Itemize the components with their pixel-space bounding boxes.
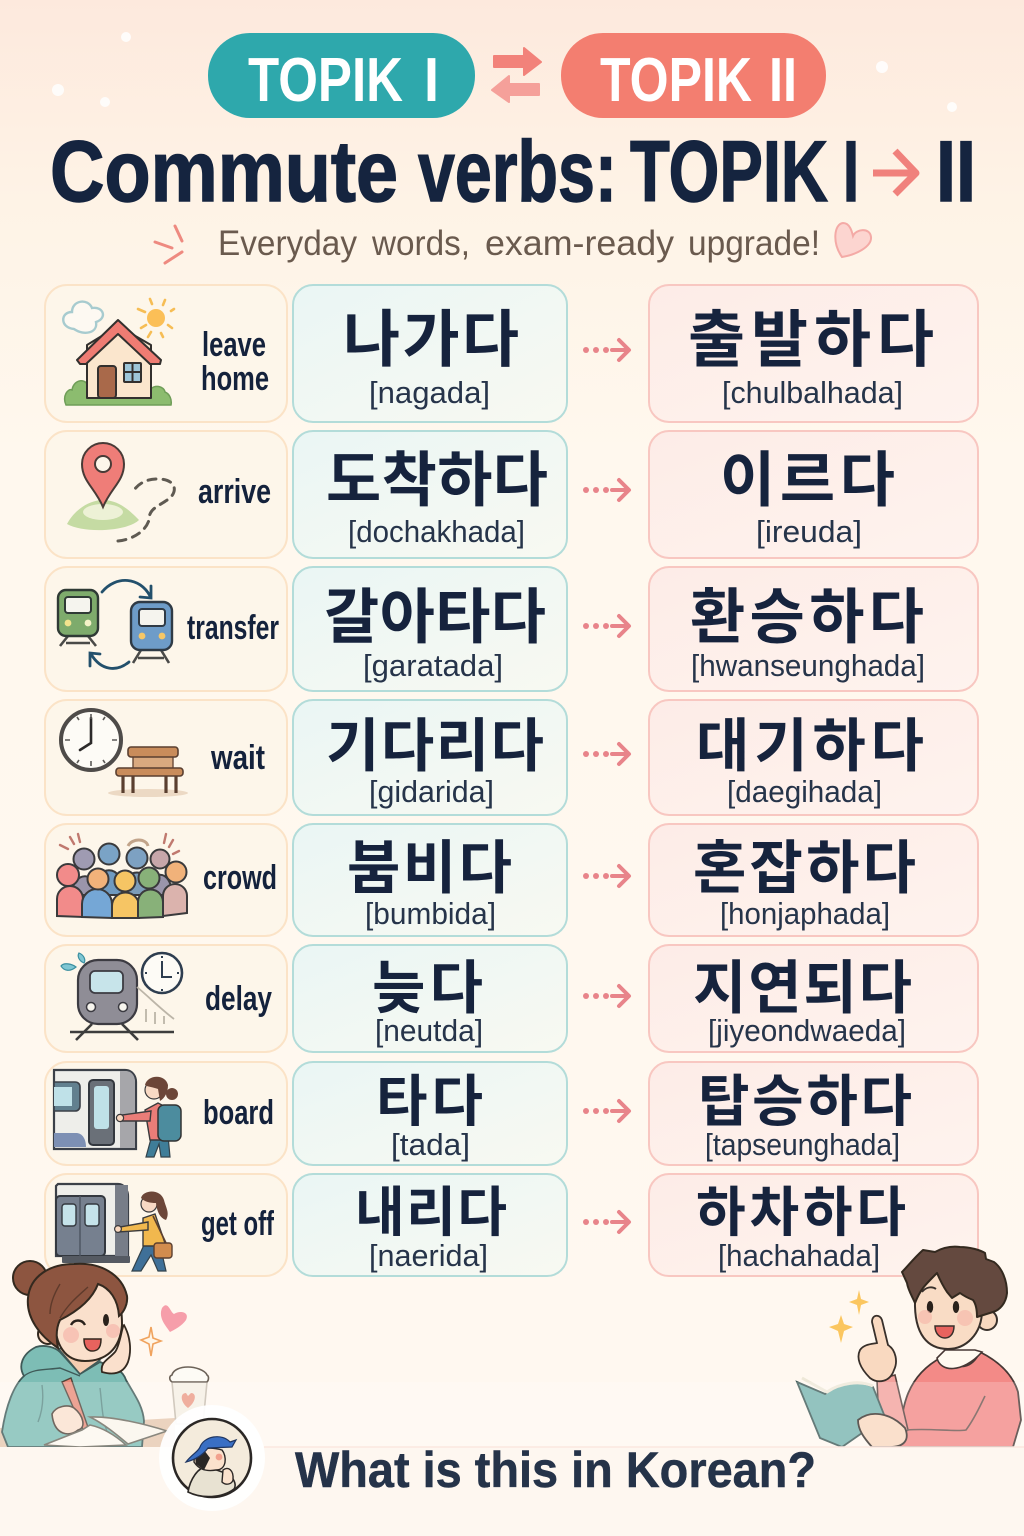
panel: 혼잡하다: [honjaphada] bbox=[720, 896, 890, 931]
icon: house with sun bbox=[63, 299, 174, 405]
label: get off: get off bbox=[201, 1205, 274, 1243]
title: Commute bbox=[50, 124, 398, 220]
icon: crowd of people bbox=[57, 834, 187, 918]
panel: leave home bbox=[45, 285, 287, 422]
panel: 기다리다: 기다리다 bbox=[326, 714, 544, 779]
icon: person boarding train bbox=[54, 1070, 181, 1157]
panel: 갈아타다: 갈아타다 bbox=[324, 584, 546, 651]
title: II bbox=[936, 124, 976, 220]
panel: delay bbox=[45, 945, 287, 1052]
panel: 나가다: 나가다 bbox=[343, 306, 519, 375]
icon: person getting off train bbox=[56, 1184, 172, 1271]
arrow bbox=[583, 1101, 629, 1121]
panel: wait bbox=[45, 700, 287, 815]
badge: TOPIK II: II bbox=[769, 46, 797, 115]
label: leave home bbox=[201, 326, 269, 398]
panel: 나가다 bbox=[293, 285, 567, 422]
label: leave home: leave bbox=[202, 326, 266, 364]
arrow bbox=[583, 1212, 629, 1232]
panel: 타다: [tada] bbox=[391, 1127, 470, 1162]
label: transfer: transfer bbox=[187, 609, 279, 647]
arrow bbox=[583, 986, 629, 1006]
panel: 환승하다: 환승하다 bbox=[690, 584, 924, 651]
panel: 대기하다 bbox=[649, 700, 978, 815]
panel: 도착하다: 도착하다 bbox=[326, 447, 548, 514]
panel: 갈아타다 bbox=[293, 567, 567, 691]
panel: 내리다: [naerida] bbox=[369, 1238, 488, 1273]
row 7: board bbox=[45, 1062, 978, 1165]
panel: 타다 bbox=[293, 1062, 567, 1165]
label: wait: wait bbox=[210, 739, 265, 777]
panel: 이르다: [ireuda] bbox=[756, 514, 862, 549]
label: arrive: arrive bbox=[198, 473, 271, 511]
arrow bbox=[583, 616, 629, 636]
panel: board bbox=[45, 1062, 287, 1165]
row 3: transfer bbox=[45, 567, 978, 691]
panel: 붐비다: 붐비다 bbox=[347, 836, 512, 901]
subtitle: words, bbox=[371, 224, 470, 263]
label: delay: delay bbox=[205, 980, 272, 1018]
panel: 도착하다 bbox=[293, 431, 567, 558]
panel: 타다: 타다 bbox=[376, 1070, 483, 1133]
panel: 하차하다 bbox=[649, 1174, 978, 1276]
panel: 이르다 bbox=[649, 431, 978, 558]
panel: 도착하다: [dochakhada] bbox=[348, 514, 525, 549]
arrow bbox=[583, 340, 629, 360]
arrow bbox=[583, 744, 629, 764]
illustration: boy with book bbox=[797, 1247, 1021, 1447]
panel: get off bbox=[45, 1174, 287, 1276]
panel: 하차하다: [hachahada] bbox=[718, 1238, 880, 1273]
panel: 환승하다 bbox=[649, 567, 978, 691]
badge: TOPIK II bbox=[561, 33, 826, 118]
row 1: leave home bbox=[45, 285, 978, 422]
subtitle: exam-ready bbox=[485, 224, 675, 263]
arrow bbox=[583, 866, 629, 886]
icon: delayed train and clock bbox=[61, 953, 182, 1040]
panel: 혼잡하다: 혼잡하다 bbox=[693, 836, 916, 901]
panel: 혼잡하다 bbox=[649, 824, 978, 936]
subtitle: Everyday bbox=[218, 224, 357, 263]
icon: exchange arrows bbox=[492, 48, 541, 102]
panel: 나가다: [nagada] bbox=[369, 375, 490, 410]
icon: location pin bbox=[67, 443, 174, 541]
panel: crowd bbox=[45, 824, 287, 936]
panel: 하차하다: 하차하다 bbox=[696, 1183, 906, 1243]
lower wash over characters bbox=[0, 1382, 1024, 1447]
footer band bbox=[0, 1447, 1024, 1536]
panel: 기다리다: [gidarida] bbox=[369, 774, 494, 809]
row 8: get off bbox=[45, 1174, 978, 1276]
badge: TOPIK II: TOPIK bbox=[600, 46, 752, 115]
badge: TOPIK I bbox=[208, 33, 475, 118]
subtitle bbox=[155, 223, 871, 263]
panel: 출발하다: [chulbalhada] bbox=[722, 375, 903, 410]
panel: transfer bbox=[45, 567, 287, 691]
panel: 붐비다: [bumbida] bbox=[365, 896, 496, 931]
panel: 늦다 bbox=[293, 945, 567, 1052]
panel: 이르다: 이르다 bbox=[720, 447, 895, 514]
panel: 출발하다 bbox=[649, 285, 978, 422]
panel: 늦다: [neutda] bbox=[375, 1013, 483, 1048]
panel: 탑승하다: 탑승하다 bbox=[698, 1070, 912, 1133]
panel: 탑승하다 bbox=[649, 1062, 978, 1165]
panel: 출발하다: 출발하다 bbox=[688, 306, 934, 375]
label: board: board bbox=[203, 1094, 274, 1132]
panel: 내리다: 내리다 bbox=[355, 1183, 507, 1243]
title bbox=[50, 124, 976, 220]
row 5: crowd bbox=[45, 824, 978, 936]
panel: 내리다 bbox=[293, 1174, 567, 1276]
title: verbs: bbox=[418, 124, 617, 220]
title: TOPIK bbox=[630, 124, 828, 220]
row 4: wait bbox=[45, 700, 978, 815]
title: I bbox=[843, 124, 859, 220]
subtitle: upgrade! bbox=[688, 224, 820, 263]
panel: 갈아타다: [garatada] bbox=[363, 648, 503, 683]
panel: 환승하다: [hwanseunghada] bbox=[691, 648, 925, 683]
arrow bbox=[583, 480, 629, 500]
panel: 지연되다: 지연되다 bbox=[693, 956, 912, 1021]
panel: 대기하다: 대기하다 bbox=[696, 714, 924, 779]
label: crowd: crowd bbox=[203, 859, 277, 897]
panel: 지연되다: [jiyeondwaeda] bbox=[708, 1013, 906, 1048]
panel: 기다리다 bbox=[293, 700, 567, 815]
badge: TOPIK I: TOPIK bbox=[248, 46, 403, 115]
label: leave home: home bbox=[201, 360, 269, 398]
icon: avatar badge bbox=[159, 1405, 265, 1511]
illustration: girl studying bbox=[0, 1261, 208, 1447]
panel: 지연되다 bbox=[649, 945, 978, 1052]
panel: 늦다: 늦다 bbox=[372, 956, 483, 1021]
panel: 탑승하다: [tapseunghada] bbox=[705, 1127, 900, 1162]
panel: arrive bbox=[45, 431, 287, 558]
icon: clock and bench bbox=[61, 710, 188, 797]
badge: TOPIK I: I bbox=[424, 46, 439, 115]
panel: 붐비다 bbox=[293, 824, 567, 936]
row 2: arrive bbox=[45, 431, 978, 558]
icon: two trains with arrows bbox=[58, 580, 172, 668]
footer question: What is this in Korean? bbox=[295, 1442, 816, 1498]
panel: 대기하다: [daegihada] bbox=[727, 774, 882, 809]
row 6: delay bbox=[45, 945, 978, 1052]
